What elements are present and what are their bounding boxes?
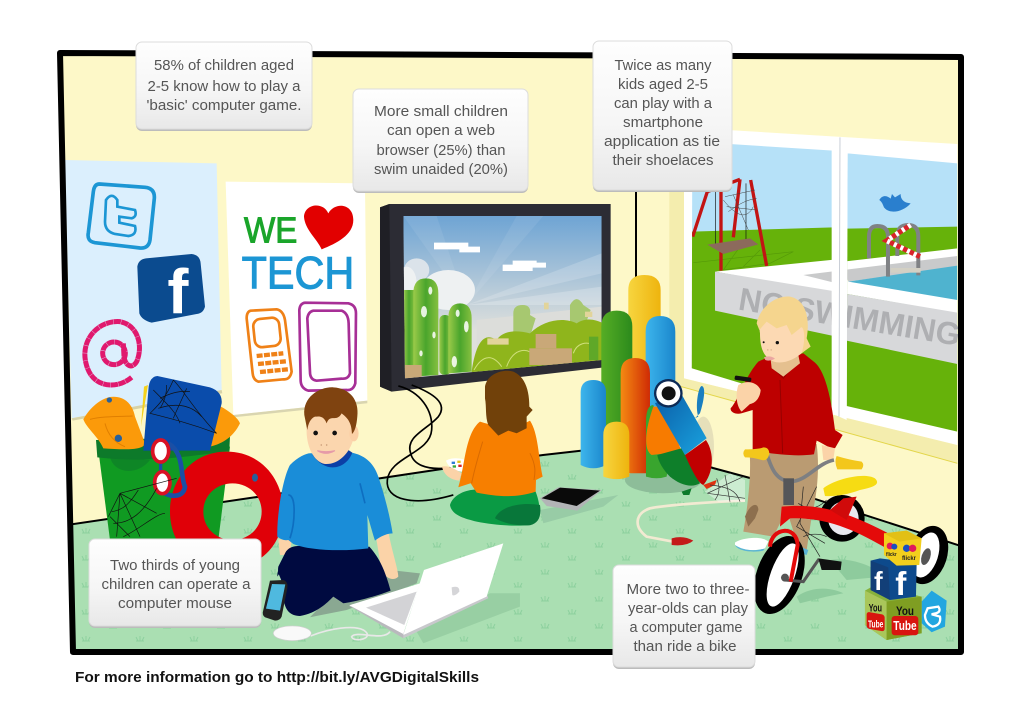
shoes bbox=[735, 538, 768, 550]
rear wheels bbox=[819, 495, 955, 589]
callout: ride a bike: More two to three- bbox=[626, 581, 750, 598]
right pane bbox=[843, 150, 960, 437]
callout: smartphone: their shoelaces bbox=[612, 152, 714, 169]
callout: ride a bike: year-olds can play bbox=[628, 600, 748, 617]
floor shadow bbox=[797, 559, 883, 603]
footer link text: For more information go to http://bit.ly/AVGDigitalSkills bbox=[75, 669, 479, 686]
flickr block bbox=[884, 531, 922, 566]
laptop, mouse and phone bbox=[263, 543, 520, 643]
callout: computer mouse bbox=[89, 539, 261, 628]
stacking pegs bbox=[581, 275, 675, 479]
tablet on floor bbox=[540, 487, 602, 511]
red frame bbox=[770, 497, 888, 582]
icon: laptop bbox=[349, 543, 520, 643]
floor shadow bbox=[310, 570, 420, 617]
trousers bbox=[450, 490, 539, 526]
hands bbox=[278, 539, 292, 555]
callout: web browser: browser (25%) than bbox=[376, 142, 506, 159]
callout: smartphone: kids aged 2-5 bbox=[618, 76, 708, 93]
callout: basic computer game: 'basic' computer game. bbox=[146, 97, 302, 114]
sweater bbox=[277, 453, 393, 550]
youtube block: You bbox=[896, 604, 914, 618]
floor shadow bbox=[540, 495, 618, 523]
wall bbox=[63, 56, 958, 544]
icon: twitter bbox=[88, 184, 154, 248]
controller and hand bbox=[442, 458, 467, 481]
girl in orange sweater bbox=[442, 371, 618, 526]
poster: we love tech: TECH bbox=[242, 247, 354, 298]
neck bbox=[770, 353, 800, 377]
facebook block: f bbox=[874, 566, 883, 596]
callout: basic computer game: 2-5 know how to play a bbox=[148, 78, 301, 95]
callout: web browser: can open a web bbox=[387, 122, 495, 139]
callout: ride a bike: a computer game bbox=[630, 619, 742, 636]
callout: computer mouse: Two thirds of young bbox=[110, 557, 240, 574]
callout: smartphone bbox=[593, 41, 732, 192]
hair bbox=[304, 387, 358, 434]
callout: web browser bbox=[353, 89, 528, 193]
head bbox=[760, 309, 806, 363]
blue float board bbox=[141, 376, 222, 451]
callout: smartphone: smartphone bbox=[623, 114, 703, 131]
rope and web on floor bbox=[638, 473, 745, 545]
icon: heart bbox=[304, 206, 353, 249]
facebook block: f bbox=[895, 566, 907, 603]
flickr block: flickr bbox=[886, 552, 897, 558]
callout: ride a bike: than ride a bike bbox=[634, 638, 736, 655]
tricycle bbox=[743, 447, 955, 621]
swing bbox=[693, 179, 767, 271]
face features bbox=[763, 341, 779, 361]
goggles bbox=[153, 440, 185, 496]
callout: smartphone: can play with a bbox=[614, 95, 713, 112]
icon: facebook: f bbox=[167, 257, 189, 327]
icon: at sign bbox=[85, 322, 139, 385]
youtube block: You bbox=[869, 603, 882, 615]
youtube block: Tube bbox=[868, 619, 884, 630]
face features bbox=[313, 431, 337, 453]
callout: smartphone: application as tie bbox=[604, 133, 720, 150]
callout: ride a bike bbox=[613, 565, 755, 669]
poster: we love tech bbox=[226, 182, 367, 417]
icon: mobile phone drawing bbox=[247, 309, 292, 382]
orange armbands bbox=[83, 397, 240, 449]
callout: basic computer game: 58% of children aged bbox=[154, 57, 294, 74]
bucket with swim toys bbox=[83, 376, 283, 568]
poster: social icons bbox=[65, 160, 222, 421]
callout: web browser: More small children bbox=[374, 103, 508, 120]
boy in red jacket upper body bbox=[731, 296, 843, 460]
game screen bbox=[397, 216, 603, 379]
youtube block: Tube bbox=[893, 619, 917, 633]
callout: web browser: swim unaided (20%) bbox=[374, 161, 508, 178]
handlebar bbox=[743, 447, 863, 505]
callout: computer mouse: children can operate a bbox=[102, 576, 251, 593]
hair bbox=[485, 371, 533, 436]
front wheel bbox=[744, 529, 815, 621]
bucket bbox=[96, 437, 230, 540]
window with pool view bbox=[669, 127, 963, 463]
web on tricycle bbox=[795, 487, 827, 557]
scene frame bbox=[60, 53, 961, 652]
callout: smartphone: Twice as many bbox=[614, 57, 712, 74]
head bbox=[306, 414, 353, 464]
monster toy bbox=[646, 379, 717, 495]
neck and collar bbox=[313, 450, 352, 467]
flickr block: flickr bbox=[902, 555, 916, 562]
left pane bbox=[692, 144, 832, 408]
icon: smartphone bbox=[263, 563, 288, 621]
callout: basic computer game bbox=[136, 42, 312, 131]
icon: computer mouse bbox=[273, 626, 390, 641]
sweater bbox=[458, 421, 543, 496]
hair bbox=[757, 296, 811, 353]
icon: facebook bbox=[137, 254, 205, 327]
tv cables bbox=[387, 385, 453, 501]
youtube block bbox=[865, 585, 922, 640]
red swim ring bbox=[170, 452, 282, 558]
yellow seat bbox=[823, 476, 877, 496]
boy in blue sweater bbox=[277, 387, 420, 617]
callout: computer mouse: computer mouse bbox=[118, 595, 232, 612]
icon: tablet drawing bbox=[299, 303, 356, 391]
window mullion bbox=[832, 137, 848, 420]
scene: room illustration bbox=[55, 50, 965, 660]
floor bbox=[60, 444, 961, 655]
wall corner line bbox=[635, 192, 637, 277]
hand and phone bbox=[734, 375, 835, 460]
facebook block bbox=[871, 558, 917, 603]
poster: we love tech: WE bbox=[244, 210, 297, 251]
pool ladder and hazard tape bbox=[869, 225, 921, 277]
social media blocks bbox=[865, 531, 947, 640]
spider web on bucket bbox=[108, 478, 177, 537]
no swimming sign: NO SWIMMING bbox=[736, 281, 963, 353]
boy in red jacket legs bbox=[735, 444, 818, 555]
twitter block bbox=[922, 591, 947, 632]
stacking toys and monster bbox=[581, 275, 717, 495]
jacket bbox=[731, 353, 843, 455]
icon: twitter bird bbox=[879, 194, 911, 212]
tv with game on screen bbox=[380, 204, 611, 392]
pedals and crank bbox=[781, 558, 842, 582]
trousers bbox=[278, 546, 391, 616]
